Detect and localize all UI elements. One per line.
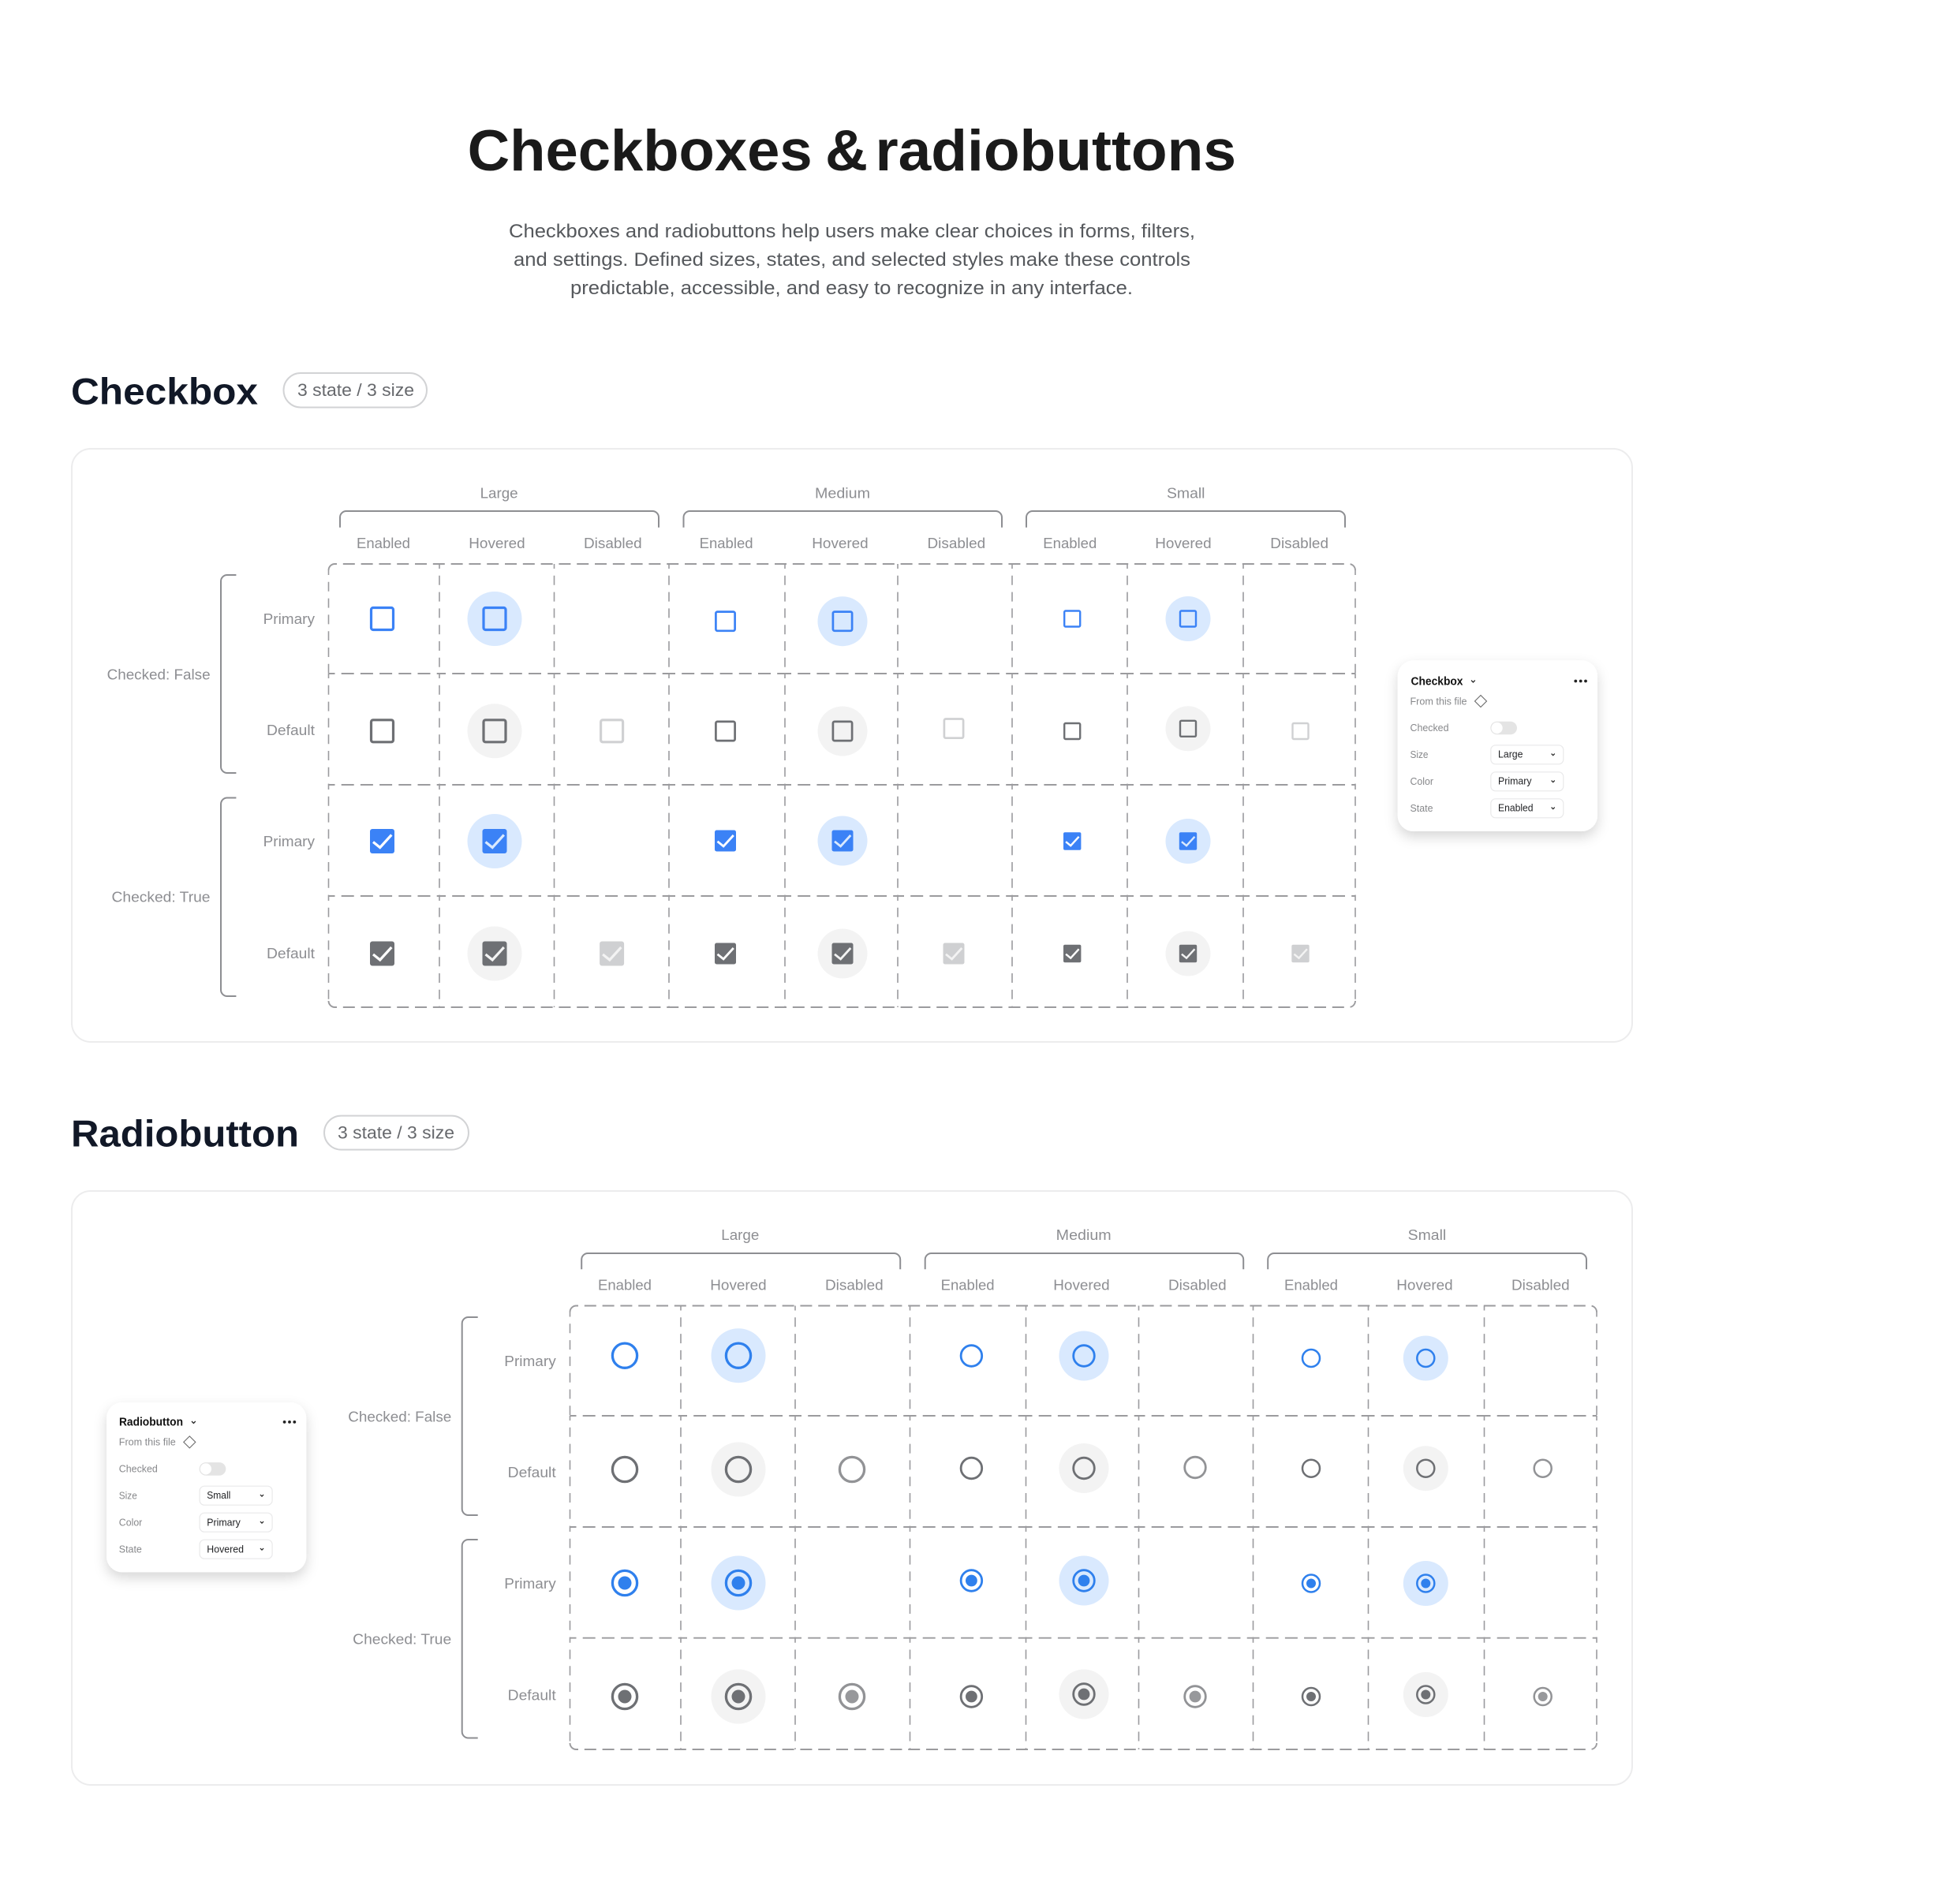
icon: large primary unchecked enabled xyxy=(371,607,393,629)
card: checkbox properties: Checked xyxy=(1411,722,1449,734)
size labels and brackets: Small xyxy=(1167,485,1205,502)
title: Checkboxes xyxy=(468,119,813,183)
text block: intro: predictable, accessible, and easy to recognize in any interface. xyxy=(570,278,1133,299)
dashed variant grid xyxy=(328,564,1355,1007)
badge: checkbox variants: 3 state / 3 size xyxy=(297,380,414,400)
icon: small primary unchecked enabled xyxy=(1064,610,1080,626)
size labels and brackets: Large xyxy=(480,485,518,502)
card: checkbox properties: State xyxy=(1411,803,1433,814)
icon: medium primary off enabled xyxy=(961,1346,982,1366)
size labels and brackets: Medium xyxy=(1056,1226,1112,1243)
icon: small default on enabled xyxy=(1302,1688,1320,1705)
icon: large default unchecked disabled xyxy=(601,720,623,742)
state column labels: Hovered xyxy=(1053,1276,1110,1293)
state column labels xyxy=(357,535,1328,551)
icon: medium primary checked enabled xyxy=(715,830,736,852)
icon: small default checked enabled xyxy=(1063,945,1081,962)
icon: large primary checked enabled xyxy=(370,829,394,853)
icon: small primary off hovered xyxy=(1403,1336,1448,1380)
icon: small primary checked hovered xyxy=(1166,819,1210,864)
checked group labels and brackets: Checked: False xyxy=(348,1408,451,1424)
icon: medium primary off hovered xyxy=(1059,1331,1109,1380)
color row labels: Default xyxy=(267,945,315,961)
state column labels: Hovered xyxy=(812,535,869,551)
icon: small default unchecked enabled xyxy=(1064,723,1080,739)
color row labels: Default xyxy=(508,1686,556,1704)
state column labels: Hovered xyxy=(710,1276,767,1293)
icon: large primary on enabled xyxy=(612,1570,637,1596)
icon: large default unchecked enabled xyxy=(371,720,393,742)
size labels and brackets xyxy=(581,1226,1586,1269)
color row labels: Primary xyxy=(504,1575,556,1592)
title: radiobuttons xyxy=(876,119,1236,183)
icon: small primary on hovered xyxy=(1403,1561,1448,1606)
icon: large default checked enabled xyxy=(370,942,394,965)
text block: intro xyxy=(509,221,1195,299)
icon: small primary off enabled xyxy=(1302,1350,1320,1367)
icon: small default unchecked hovered xyxy=(1166,706,1210,751)
color row labels: Default xyxy=(508,1464,556,1480)
title: & xyxy=(825,119,868,183)
color row labels xyxy=(263,610,316,961)
card: checkbox properties: Enabled xyxy=(1498,802,1534,814)
card: checkbox properties: From this file xyxy=(1411,696,1467,707)
icon: medium default checked enabled xyxy=(715,943,736,964)
icon: small default checked disabled xyxy=(1291,945,1310,962)
text block: intro: and settings. Defined sizes, states, and selected styles make these controls xyxy=(514,249,1190,271)
icon: medium default off hovered xyxy=(1059,1443,1109,1493)
checked group labels and brackets xyxy=(348,1317,478,1738)
icon: large default unchecked hovered xyxy=(467,704,522,758)
icon: medium default unchecked disabled xyxy=(944,719,963,738)
dashed variant grid xyxy=(570,1306,1597,1749)
badge: radiobutton variants xyxy=(324,1116,469,1150)
color row labels: Primary xyxy=(504,1353,556,1369)
panel: radiobutton matrix xyxy=(72,1191,1632,1785)
state column labels: Enabled xyxy=(357,535,410,551)
state column labels: Disabled xyxy=(825,1276,884,1293)
checked group labels and brackets: Checked: False xyxy=(107,666,211,683)
icon: small primary on enabled xyxy=(1302,1574,1320,1592)
state column labels: Enabled xyxy=(700,535,753,551)
card: checkbox properties: Primary xyxy=(1498,775,1532,787)
icon: medium default off disabled xyxy=(1185,1457,1205,1478)
icon: large default checked disabled xyxy=(600,942,624,965)
icon: small default off disabled xyxy=(1534,1460,1552,1477)
state column labels: Enabled xyxy=(1043,535,1097,551)
color row labels xyxy=(504,1353,556,1704)
checked group labels and brackets: Checked: True xyxy=(353,1631,451,1648)
card: radiobutton properties: Radiobutton xyxy=(119,1417,183,1429)
card: checkbox properties: Large xyxy=(1498,748,1523,760)
title xyxy=(468,119,1236,183)
state column labels: Disabled xyxy=(1168,1276,1227,1293)
icon: large default off hovered xyxy=(712,1442,765,1497)
card: radiobutton properties: Primary xyxy=(207,1516,241,1528)
icon: large primary checked hovered xyxy=(467,814,522,868)
icon: large default on enabled xyxy=(612,1684,637,1709)
icon: small default on hovered xyxy=(1403,1672,1448,1717)
state column labels: Hovered xyxy=(1396,1276,1453,1293)
panel: checkbox matrix xyxy=(72,449,1632,1042)
size labels and brackets: Medium xyxy=(815,485,870,502)
card: radiobutton properties: From this file xyxy=(119,1437,176,1448)
icon: large primary unchecked hovered xyxy=(467,592,522,646)
icon: medium default off enabled xyxy=(961,1458,982,1479)
icon: small primary checked enabled xyxy=(1063,832,1081,850)
card: radiobutton properties xyxy=(106,1402,306,1572)
icon: small default off enabled xyxy=(1302,1460,1320,1477)
icon: medium primary unchecked enabled xyxy=(716,612,735,631)
card: checkbox properties xyxy=(1398,660,1597,831)
heading: Checkbox: Checkbox xyxy=(71,371,258,413)
size labels and brackets xyxy=(340,485,1345,528)
icon: large default checked hovered xyxy=(467,926,522,981)
icon: large default off enabled xyxy=(612,1457,637,1482)
card: checkbox properties: Checkbox xyxy=(1411,675,1463,688)
heading: Radiobutton: Radiobutton xyxy=(71,1112,299,1155)
icon: medium default on disabled xyxy=(1185,1686,1205,1707)
color row labels: Primary xyxy=(263,610,316,627)
state column labels: Enabled xyxy=(941,1276,995,1293)
state column labels: Hovered xyxy=(469,535,525,551)
icon: medium primary unchecked hovered xyxy=(817,596,868,646)
card: checkbox properties: Size xyxy=(1411,749,1429,760)
size labels and brackets: Small xyxy=(1408,1226,1446,1243)
icon: medium default checked hovered xyxy=(817,929,868,978)
card: radiobutton properties: Small xyxy=(207,1489,230,1501)
icon: medium default on enabled xyxy=(961,1686,982,1707)
state column labels: Disabled xyxy=(1270,535,1328,551)
badge: radiobutton variants: 3 state / 3 size xyxy=(338,1122,454,1142)
color row labels: Default xyxy=(267,722,315,738)
checked group labels and brackets: Checked: True xyxy=(112,889,210,905)
checked group labels and brackets xyxy=(107,575,236,996)
icon: medium default unchecked enabled xyxy=(716,722,735,741)
state column labels: Enabled xyxy=(1284,1276,1338,1293)
icon: large default on disabled xyxy=(839,1684,865,1709)
state column labels: Disabled xyxy=(584,535,642,551)
card: radiobutton properties: Checked xyxy=(119,1463,158,1474)
card: checkbox properties: Color xyxy=(1411,776,1433,787)
icon: small primary unchecked hovered xyxy=(1166,596,1210,641)
text block: intro: Checkboxes and radiobuttons help users make clear choices in forms, filters, xyxy=(509,221,1195,242)
icon: small default unchecked disabled xyxy=(1292,723,1308,739)
icon: large default on hovered xyxy=(712,1669,765,1724)
card: radiobutton properties: Color xyxy=(119,1517,142,1528)
icon: large primary on hovered xyxy=(712,1555,765,1611)
state column labels: Hovered xyxy=(1155,535,1212,551)
icon: medium primary on hovered xyxy=(1059,1555,1109,1606)
size labels and brackets: Large xyxy=(721,1226,759,1243)
icon: large primary off hovered xyxy=(712,1328,765,1383)
card: radiobutton properties: Hovered xyxy=(207,1543,244,1555)
icon: medium primary on enabled xyxy=(961,1570,982,1591)
color row labels: Primary xyxy=(263,833,316,849)
icon: medium default unchecked hovered xyxy=(817,707,868,756)
icon: medium default on hovered xyxy=(1059,1669,1109,1719)
icon: large primary off enabled xyxy=(612,1343,637,1368)
state column labels xyxy=(598,1276,1570,1293)
icon: small default off hovered xyxy=(1403,1446,1448,1491)
card: radiobutton properties: State xyxy=(119,1544,142,1555)
state column labels: Disabled xyxy=(928,535,985,551)
icon: medium default checked disabled xyxy=(943,943,964,964)
icon: medium primary checked hovered xyxy=(817,816,868,866)
state column labels: Enabled xyxy=(598,1276,652,1293)
badge: checkbox variants xyxy=(284,373,427,407)
icon: small default checked hovered xyxy=(1166,931,1210,976)
state column labels: Disabled xyxy=(1511,1276,1570,1293)
icon: small default on disabled xyxy=(1534,1688,1552,1705)
icon: large default off disabled xyxy=(839,1457,865,1482)
card: radiobutton properties: Size xyxy=(119,1490,137,1501)
